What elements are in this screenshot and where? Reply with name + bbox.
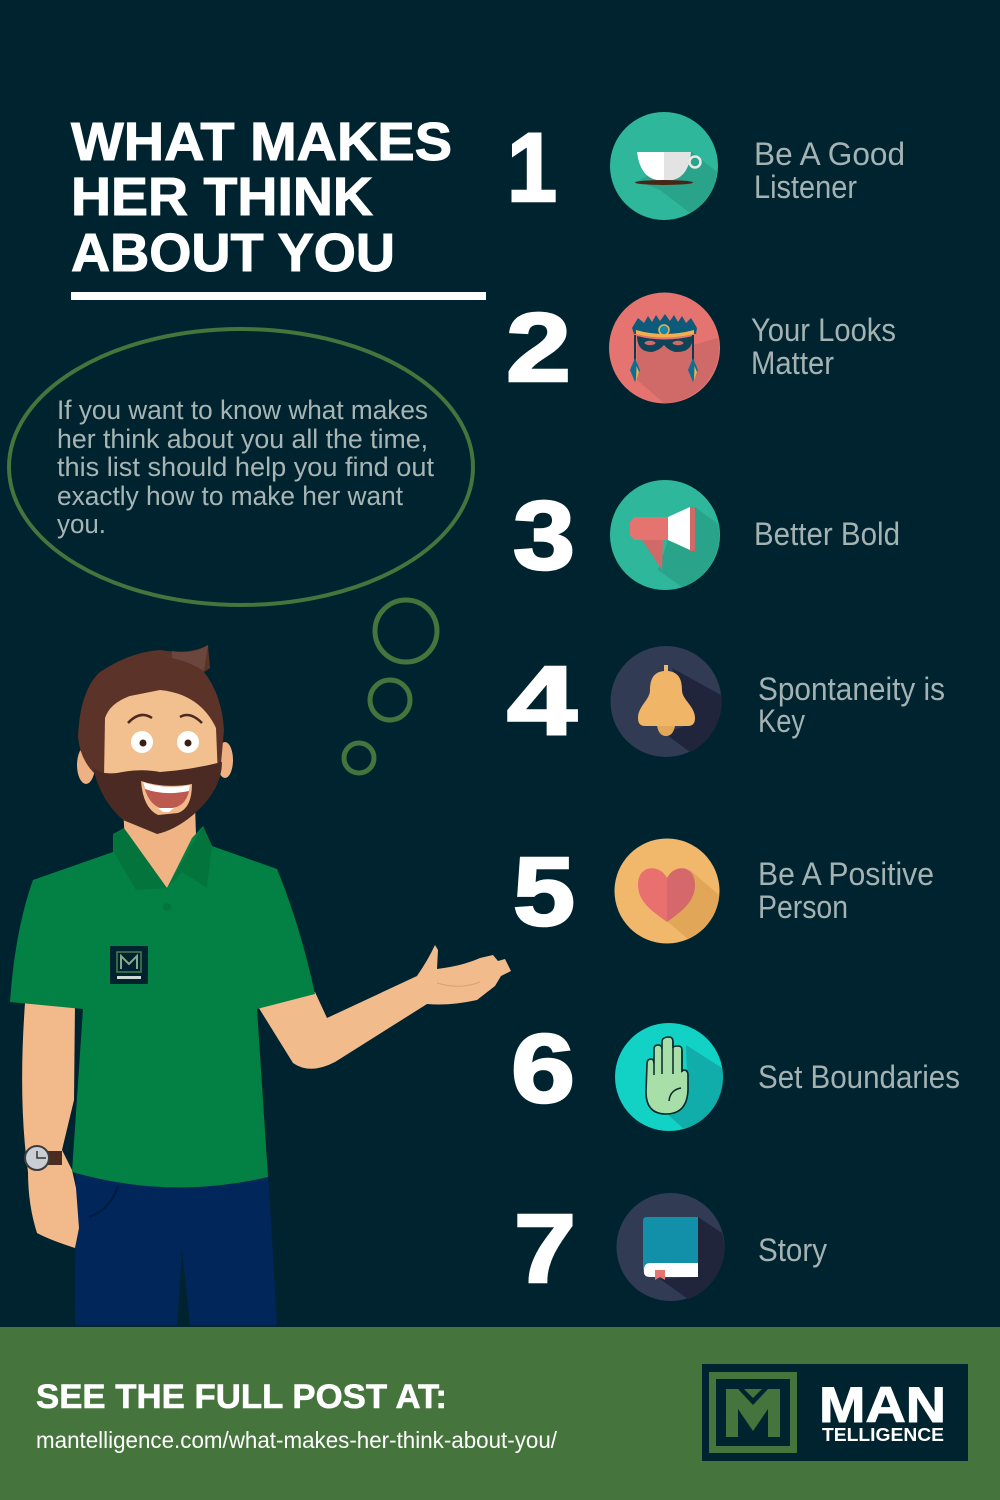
watch bbox=[25, 1146, 62, 1170]
item 4 bbox=[507, 646, 945, 757]
number 3: 3 bbox=[513, 481, 575, 590]
left arm bbox=[22, 1003, 79, 1248]
icon: megaphone bbox=[610, 480, 720, 590]
title underline bbox=[71, 292, 486, 300]
item 6 bbox=[511, 1014, 960, 1131]
man illustration bbox=[10, 645, 511, 1325]
title: WHAT MAKES bbox=[71, 112, 452, 172]
pants bbox=[75, 1170, 277, 1325]
icon: heart bbox=[614, 838, 720, 944]
eyes bbox=[128, 715, 202, 753]
number 5: 5 bbox=[513, 837, 575, 946]
label: Be A Good bbox=[754, 136, 905, 172]
number 7: 7 bbox=[514, 1194, 576, 1303]
right arm bbox=[257, 945, 511, 1069]
label: Better Bold bbox=[754, 516, 900, 552]
label bbox=[751, 312, 896, 381]
intro text: If you want to know what makes bbox=[57, 395, 428, 425]
green polo shirt bbox=[10, 826, 315, 1187]
intro text: exactly how to make her want bbox=[57, 481, 403, 511]
number 2: 2 bbox=[506, 293, 571, 402]
number 4: 4 bbox=[507, 646, 577, 755]
label bbox=[758, 671, 945, 739]
footer url: mantelligence.com/what-makes-her-think-about-you/ bbox=[36, 1427, 558, 1453]
icon: bell bbox=[610, 646, 722, 757]
title: HER THINK bbox=[71, 167, 373, 227]
intro text bbox=[57, 395, 434, 539]
label: Matter bbox=[751, 345, 834, 381]
icon: carnival mask bbox=[609, 292, 720, 404]
footer banner bbox=[0, 1327, 1000, 1500]
label: Be A Positive bbox=[758, 856, 934, 892]
intro text: this list should help you find out bbox=[57, 452, 434, 482]
logo bbox=[702, 1364, 968, 1461]
label: Set Boundaries bbox=[758, 1059, 960, 1095]
number 1: 1 bbox=[507, 113, 557, 222]
intro text: her think about you all the time, bbox=[57, 424, 428, 454]
label bbox=[754, 136, 905, 205]
label: Your Looks bbox=[751, 312, 896, 348]
number 6: 6 bbox=[511, 1014, 575, 1123]
logo: MAN bbox=[819, 1377, 946, 1433]
logo: TELLIGENCE bbox=[822, 1425, 944, 1445]
icon: coffee cup bbox=[610, 112, 718, 220]
label: Spontaneity is bbox=[758, 671, 945, 707]
footer heading: SEE THE FULL POST AT: bbox=[36, 1378, 447, 1416]
item 2 bbox=[506, 292, 896, 404]
label: Person bbox=[758, 889, 848, 925]
title: ABOUT YOU bbox=[71, 223, 395, 283]
neck bbox=[123, 805, 196, 888]
intro text: you. bbox=[57, 509, 106, 539]
label: Listener bbox=[754, 169, 857, 205]
item 1 bbox=[507, 112, 905, 222]
label: Key bbox=[758, 703, 805, 739]
item 3 bbox=[513, 480, 900, 590]
title bbox=[71, 112, 452, 283]
item 5 bbox=[513, 837, 934, 946]
item 7 bbox=[514, 1193, 827, 1303]
label: Story bbox=[758, 1232, 827, 1268]
shirt badge bbox=[110, 946, 148, 984]
thought bubble bbox=[9, 329, 473, 773]
icon: raised hand bbox=[615, 1023, 723, 1131]
collar bbox=[113, 826, 212, 890]
head bbox=[77, 645, 233, 834]
icon: book bbox=[616, 1193, 724, 1301]
label bbox=[758, 856, 934, 925]
